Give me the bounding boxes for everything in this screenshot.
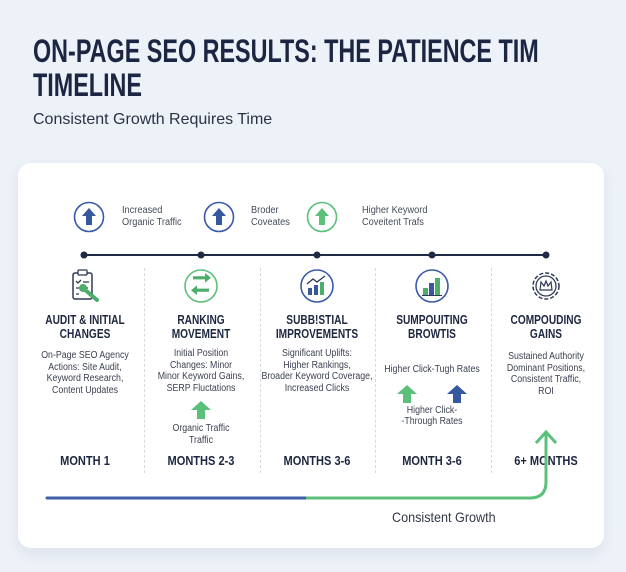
column 2: Minor Keyword Gains, — [158, 371, 244, 382]
label 1: Organic Traffic — [122, 217, 182, 228]
label 3: Higher Keyword — [362, 205, 427, 216]
column 3: Broader Keyword Coverage, — [261, 371, 373, 382]
column 1: Content Updates — [52, 384, 118, 396]
label 2 — [251, 205, 290, 228]
column 4: Higher Click-Tugh Rates — [384, 364, 480, 375]
icon: clipboard wrench — [72, 269, 100, 302]
column 3: SUBB!STIAL — [286, 312, 348, 327]
column 4: -Through Rates — [401, 416, 463, 427]
column 5: Consistent Traffic, — [511, 374, 581, 385]
column 2: Initial Position — [174, 348, 228, 359]
text: 6+ MONTHS — [514, 453, 578, 468]
panel: timeline card — [18, 163, 604, 548]
icon: up arrow 2 — [204, 202, 234, 232]
icon: gear crown — [532, 272, 560, 300]
icon: up arrow 1 — [74, 202, 104, 232]
top icons and labels — [74, 202, 427, 232]
column 5 — [507, 272, 585, 396]
column 5: Dominant Positions, — [507, 362, 585, 374]
column 1: CHANGES — [60, 326, 110, 341]
label 1: Increased — [122, 205, 162, 216]
growth line arrow — [46, 430, 557, 500]
timeline axis — [80, 252, 550, 258]
column 1: Actions: Site Audit, — [48, 362, 122, 372]
column 5: COMPOUDING — [511, 312, 581, 327]
icon: chart growth — [300, 269, 334, 303]
icons: arrows — [397, 385, 467, 403]
icon: bar chart — [415, 269, 449, 303]
column 3 — [261, 269, 373, 394]
label 2: Broder — [251, 205, 279, 216]
icon: swap arrows — [184, 269, 218, 303]
column 2 — [158, 269, 244, 446]
column 2: Traffic — [189, 434, 213, 446]
column 2: Changes: Minor — [170, 360, 232, 370]
column 4: BROWTIS — [408, 326, 456, 341]
column 4: SUMPOUITING — [396, 312, 468, 327]
label 3 — [362, 205, 427, 228]
column 2: MOVEMENT — [172, 326, 230, 341]
column 2: SERP Fluctations — [167, 382, 235, 394]
text: MONTHS 2-3 — [168, 453, 234, 468]
column 3: Higher Rankings, — [283, 360, 351, 370]
label: consistent growth: Consistent Growth — [392, 509, 496, 525]
column 1 — [41, 269, 129, 396]
column 3: IMPROVEMENTS — [276, 326, 358, 341]
column 1: Keyword Research, — [47, 373, 123, 384]
label 2: Coveates — [251, 217, 290, 228]
title — [33, 33, 539, 103]
column 4 — [384, 269, 480, 427]
month labels: MONTH 1 — [60, 453, 110, 468]
icon: up arrow 3 — [306, 202, 338, 232]
column 5: ROI — [538, 386, 554, 396]
text: MONTH 3-6 — [402, 453, 462, 468]
column 5: GAINS — [530, 326, 562, 341]
title: ON-PAGE SEO RESULTS: THE PATIENCE TIM — [33, 33, 539, 69]
icon: green arrow — [191, 401, 211, 419]
column 3: Increased Clicks — [285, 382, 349, 394]
column 2: Organic Traffic — [172, 423, 230, 434]
column 1: On-Page SEO Agency — [41, 350, 129, 361]
column 3: Significant Uplifts: — [282, 348, 352, 359]
column 1: AUDIT & INITIAL — [45, 312, 125, 327]
label 3: Coveitent Trafs — [362, 217, 424, 228]
text: MONTHS 3-6 — [284, 453, 350, 468]
subtitle: Consistent Growth Requires Time — [33, 111, 272, 128]
column 4: Higher Click- — [407, 404, 457, 416]
column 2: RANKING — [177, 312, 225, 327]
label 1 — [122, 205, 182, 228]
title: TIMELINE — [33, 67, 142, 103]
column 5: Sustained Authority — [508, 351, 584, 362]
